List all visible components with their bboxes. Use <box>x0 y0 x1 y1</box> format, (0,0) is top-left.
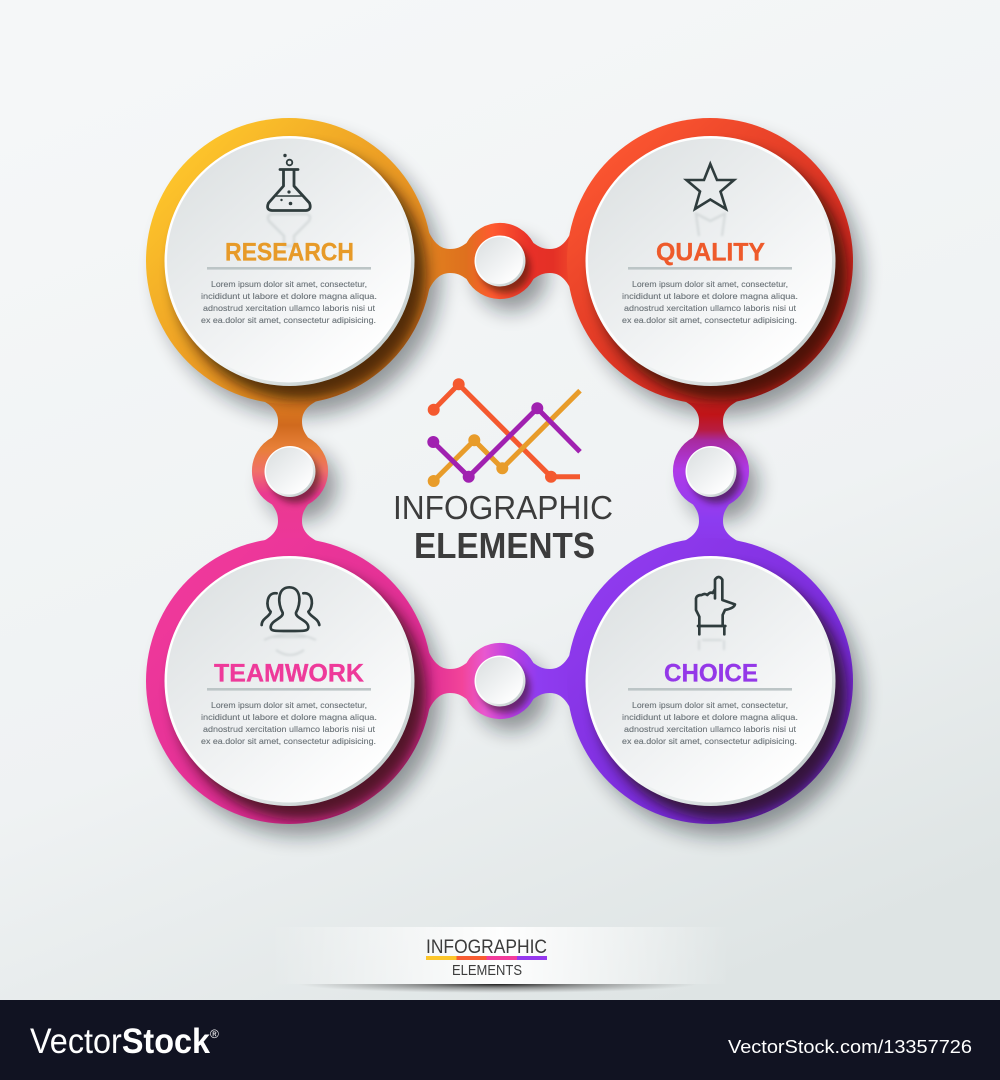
node: bottom connector disc <box>474 656 526 706</box>
connector: research to quality <box>424 219 576 303</box>
text: quality: incididunt ut labore et dolore magna aliqua. <box>622 291 798 301</box>
divider: teamwork <box>207 688 371 691</box>
icon reflection: flask <box>268 214 310 246</box>
heading: teamwork: TEAMWORK <box>214 660 364 688</box>
line: amber <box>430 391 580 484</box>
text: teamwork <box>201 700 377 746</box>
footer url: VectorStock.com/13357726 <box>728 1037 972 1057</box>
central line chart icon <box>430 381 580 484</box>
icon: pointing hand <box>696 577 735 634</box>
connector: research to teamwork <box>248 395 332 547</box>
text: choice: ex ea.dolor sit amet, consectetur adipisicing. <box>622 736 797 746</box>
divider: quality <box>628 267 792 270</box>
node: right connector disc <box>686 446 736 497</box>
footer registered mark: ® <box>210 1027 219 1041</box>
text: quality: ex ea.dolor sit amet, consectetur adipisicing. <box>622 315 797 325</box>
coloured rings <box>146 118 853 824</box>
text: quality <box>622 279 798 325</box>
text: choice: incididunt ut labore et dolore magna aliqua. <box>622 712 798 722</box>
panel: teamwork <box>164 556 414 806</box>
logo wordmark: INFOGRAPHIC <box>426 937 547 958</box>
inner shadows cast on the frame <box>174 148 847 820</box>
heading: choice: CHOICE <box>664 660 758 688</box>
icon: star <box>686 164 734 209</box>
divider: choice <box>628 688 792 691</box>
text: research: adnostrud xercitation ullamco laboris nisi ut <box>203 303 376 313</box>
text: research <box>201 279 377 325</box>
icon reflection: star <box>695 213 726 236</box>
text: teamwork: ex ea.dolor sit amet, consectetur adipisicing. <box>201 736 376 746</box>
text: choice: adnostrud xercitation ullamco laboris nisi ut <box>624 724 797 734</box>
text: teamwork: adnostrud xercitation ullamco laboris nisi ut <box>203 724 376 734</box>
text: research: incididunt ut labore et dolore magna aliqua. <box>201 291 377 301</box>
bottom logo plate <box>312 927 684 992</box>
icon reflection: team <box>264 634 316 655</box>
divider: research <box>207 267 371 270</box>
connector: quality to choice <box>669 395 753 547</box>
text: quality: adnostrud xercitation ullamco laboris nisi ut <box>624 303 797 313</box>
panel: quality <box>586 136 836 386</box>
logo subtitle: ELEMENTS <box>452 962 522 979</box>
logo colour bar <box>426 956 547 960</box>
text: research: Lorem ipsum dolor sit amet, consectetur, <box>211 279 367 289</box>
icon reflection: pointing hand <box>699 640 724 650</box>
frame drop shadow <box>159 134 862 836</box>
panel: research <box>164 136 414 386</box>
panel: choice <box>586 556 836 806</box>
node: left connector disc <box>264 446 316 497</box>
central title: INFOGRAPHIC <box>393 489 613 526</box>
text: choice: Lorem ipsum dolor sit amet, consectetur, <box>632 700 788 710</box>
connected ring frame <box>146 118 862 836</box>
icon: team <box>262 587 319 631</box>
central title <box>393 489 613 566</box>
heading: quality: QUALITY <box>656 238 765 266</box>
connector: teamwork to choice <box>424 639 576 723</box>
footer brand: VectorStock <box>30 1022 210 1061</box>
text: teamwork: incididunt ut labore et dolore magna aliqua. <box>201 712 377 722</box>
text: choice <box>622 700 798 746</box>
line: red <box>430 381 580 480</box>
text: teamwork: Lorem ipsum dolor sit amet, consectetur, <box>211 700 367 710</box>
text: research: ex ea.dolor sit amet, consectetur adipisicing. <box>201 315 376 325</box>
heading: research: RESEARCH <box>225 238 354 266</box>
node: top connector disc <box>474 236 526 286</box>
footer bar <box>0 1000 1000 1080</box>
text: quality: Lorem ipsum dolor sit amet, consectetur, <box>632 279 788 289</box>
icon: flask <box>268 154 310 210</box>
central title: ELEMENTS <box>414 525 595 566</box>
line: purple <box>430 405 580 480</box>
